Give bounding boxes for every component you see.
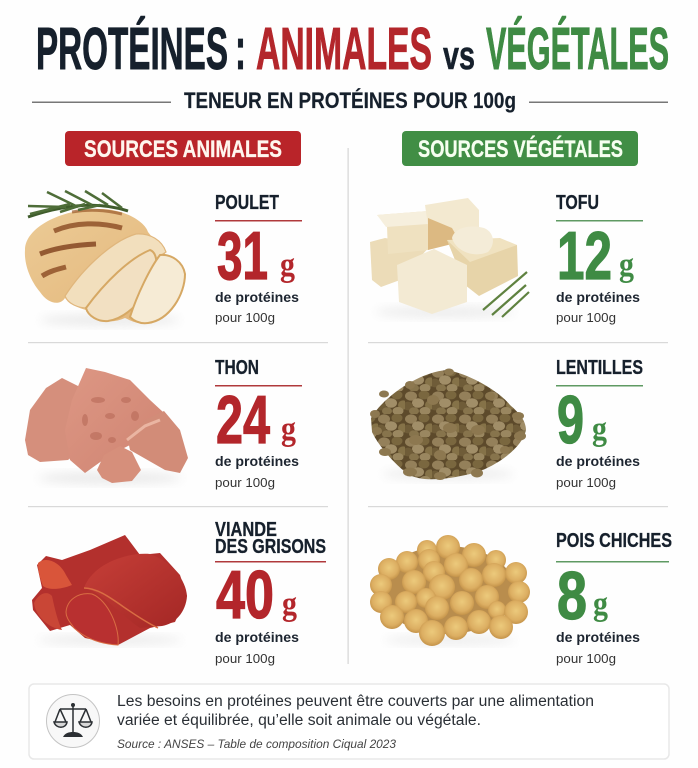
illustration: lentilles bbox=[370, 368, 526, 480]
text: viande des grisons: VIANDE bbox=[215, 519, 277, 541]
callout: note bbox=[29, 684, 669, 759]
text: lentilles: pour 100g bbox=[556, 475, 616, 490]
text: thon: pour 100g bbox=[215, 475, 275, 490]
text: viande des grisons: DES GRISONS bbox=[215, 536, 326, 558]
subtitle: TENEUR EN PROTÉINES POUR 100g bbox=[184, 88, 516, 113]
callout: note: Source : ANSES – Table de composition Ciqual 2023 bbox=[117, 737, 396, 751]
text: viande des grisons: 40 bbox=[216, 557, 274, 633]
text: lentilles bbox=[556, 357, 643, 490]
text: thon: g bbox=[281, 411, 296, 448]
text: tofu: g bbox=[619, 247, 634, 284]
text: pois chiches: g bbox=[593, 586, 608, 623]
illustration: pois chiches bbox=[370, 535, 530, 646]
badge: sources végétales: SOURCES VÉGÉTALES bbox=[418, 135, 623, 163]
text: poulet: 31 bbox=[217, 218, 268, 294]
title: : bbox=[235, 16, 246, 82]
badge: sources animales bbox=[65, 131, 301, 166]
title: vs bbox=[443, 34, 475, 78]
text: lentilles: g bbox=[592, 411, 607, 448]
text: pois chiches bbox=[556, 530, 672, 666]
text: poulet bbox=[215, 192, 302, 325]
text: viande des grisons: pour 100g bbox=[215, 651, 275, 666]
text: tofu: de protéines bbox=[556, 289, 640, 305]
text: tofu: pour 100g bbox=[556, 310, 616, 325]
text: pois chiches: 8 bbox=[557, 558, 587, 634]
text: tofu: 12 bbox=[557, 218, 612, 294]
text: lentilles: 9 bbox=[557, 382, 584, 458]
text: lentilles: de protéines bbox=[556, 453, 640, 469]
badge: sources végétales bbox=[402, 131, 638, 166]
badge: sources animales: SOURCES ANIMALES bbox=[84, 136, 282, 163]
text: viande des grisons: de protéines bbox=[215, 629, 299, 645]
text: pois chiches: POIS CHICHES bbox=[556, 530, 672, 552]
illustration: tofu bbox=[370, 198, 529, 318]
title: ANIMALES bbox=[256, 16, 432, 82]
text: thon: de protéines bbox=[215, 453, 299, 469]
text: lentilles: LENTILLES bbox=[556, 357, 643, 379]
text: viande des grisons: g bbox=[282, 586, 297, 623]
title bbox=[36, 16, 669, 82]
text: thon: THON bbox=[215, 357, 259, 379]
text: thon bbox=[215, 357, 302, 490]
text: poulet: de protéines bbox=[215, 289, 299, 305]
text: thon: 24 bbox=[216, 382, 270, 458]
text: tofu bbox=[556, 192, 643, 325]
callout: note: Les besoins en protéines peuvent être couverts par une alimentation bbox=[117, 693, 594, 710]
illustration: viande des grisons bbox=[32, 535, 187, 645]
callout: note: variée et équilibrée, qu’elle soit animale ou végétale. bbox=[117, 712, 481, 729]
text: poulet: g bbox=[280, 247, 295, 284]
title: PROTÉINES bbox=[36, 16, 228, 82]
text: pois chiches: de protéines bbox=[556, 629, 640, 645]
illustration: thon bbox=[25, 368, 188, 484]
text: pois chiches: pour 100g bbox=[556, 651, 616, 666]
text: poulet: POULET bbox=[215, 192, 279, 214]
illustration: poulet bbox=[25, 191, 185, 326]
icon: scales bbox=[46, 694, 100, 748]
text: viande des grisons bbox=[215, 519, 326, 666]
text: tofu: TOFU bbox=[556, 192, 599, 214]
text: poulet: pour 100g bbox=[215, 310, 275, 325]
